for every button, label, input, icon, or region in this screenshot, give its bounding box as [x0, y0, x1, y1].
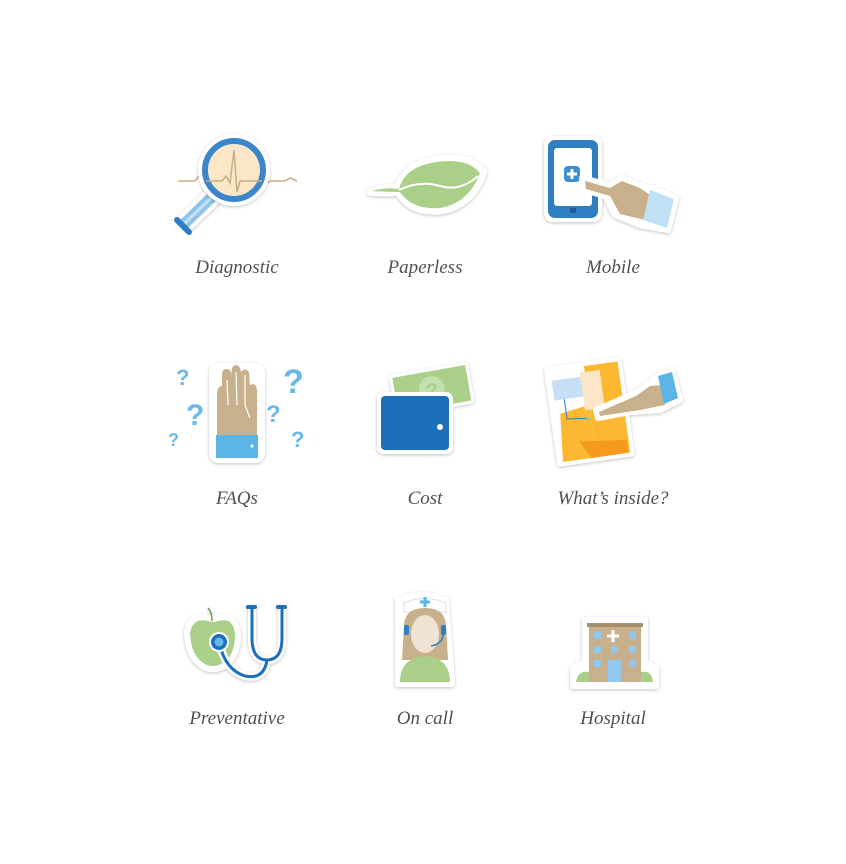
icon: FAQs hand: ? — [283, 363, 304, 401]
icon: cost wallet: ? — [424, 379, 440, 403]
label: Mobile: Mobile — [585, 257, 640, 278]
icon: FAQs hand: ? — [176, 365, 189, 390]
icon: FAQs hand — [168, 363, 304, 463]
icon: FAQs hand: ? — [291, 427, 304, 452]
label: Paperless: Paperless — [387, 257, 462, 278]
icon: diagnostic magnifier — [177, 134, 297, 232]
icon: what's inside booklet — [544, 357, 680, 467]
icon: leaf — [370, 158, 484, 211]
label: Preventative: Preventative — [188, 708, 285, 729]
label: Hospital: Hospital — [579, 708, 646, 729]
label: Diagnostic: Diagnostic — [194, 257, 279, 278]
icon: FAQs hand: ? — [266, 401, 281, 428]
label: Cost: Cost — [408, 488, 443, 509]
label: What's inside?: What’s inside? — [557, 488, 669, 509]
icon: FAQs hand: ? — [186, 399, 204, 432]
icon: on call nurse — [398, 595, 452, 684]
icon: hospital building — [573, 620, 656, 686]
icon: preventative apple stethoscope — [187, 607, 285, 677]
label: On call: On call — [397, 708, 453, 729]
icon: cost wallet — [377, 362, 475, 454]
label: FAQs: FAQs — [215, 488, 258, 509]
icon: FAQs hand: ? — [168, 430, 179, 450]
icon: mobile — [544, 136, 676, 230]
